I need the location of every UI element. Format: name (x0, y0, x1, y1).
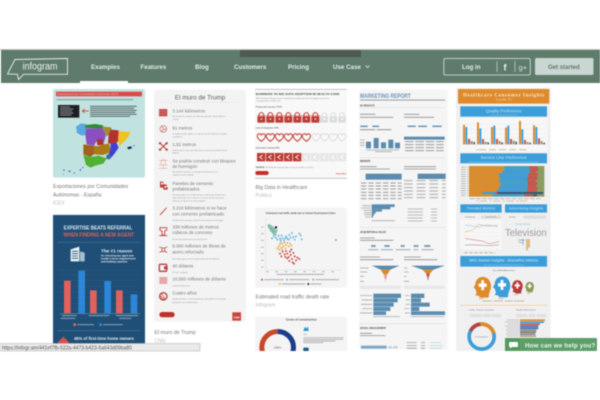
scatter points (269, 225, 336, 264)
#1 reason text: for choosing any agent was (101, 254, 134, 257)
chart title: Estimated road traffic death rate vs Human Development Index (266, 212, 336, 215)
item: length: 3.144 kilómetros (172, 109, 206, 114)
intro text: using big data in health care: (256, 100, 281, 103)
donut: £38bn (274, 345, 282, 349)
loyalty donut (469, 324, 494, 349)
item: 3.218 km: 19 kilómetros más que el hecho con bloques de hormigón (172, 219, 223, 222)
nav links (80, 64, 370, 83)
card: healthcare consumer insights (456, 88, 551, 354)
chart legend (73, 323, 123, 326)
funnel charts (360, 257, 445, 282)
caption: Spain exports: Exportaciones por Comunidades (53, 184, 129, 190)
nav links: Customers (234, 64, 267, 71)
item: 5.000 million pounds: acero reforzado (172, 250, 204, 255)
nav links: Blog (195, 64, 209, 71)
item: 1,52 metres: 1,52 metros (172, 142, 197, 147)
item: four years: Según expertos, el muro podría ser construido en un período (172, 298, 227, 301)
browser status bar (0, 344, 200, 352)
scatter legend (261, 279, 339, 285)
item: 3.218 km: 3.218 kilómetros si se hace (172, 206, 227, 211)
loyalty donut: Full Population (475, 336, 488, 339)
item: length: Recorrería los estados de California, Arizona, Nuevo México (172, 115, 226, 118)
card: Spain exports map (53, 89, 145, 178)
item: 339 million: Serían necesarios para su construcción (172, 238, 207, 241)
item: length (159, 109, 226, 121)
title: Costs of construction (286, 317, 317, 321)
card: marketing report (359, 90, 448, 350)
item: 40 dollars: 40 dólares (172, 263, 194, 268)
first-time owners stat: 46% of first-time home owners (74, 336, 135, 341)
CNN logo: CNN (234, 315, 240, 319)
item: cement panels: metros) y un grosor de ocho pulgadas (172, 200, 206, 203)
item: 91 metres: 91 metros (172, 125, 193, 130)
social engagement heading: SOCIAL ENGAGEMENT (360, 327, 387, 330)
orange header: Healthcare Consumer Insights (463, 93, 544, 98)
CNN logo (232, 312, 241, 321)
item: 5.000 million pounds: Necesarios para unir las separaciones de los bloques (172, 258, 219, 261)
headline: WHEN FINDING A NEW AGENT (63, 232, 134, 238)
differentiators heading: Hospital Differentiators (516, 308, 536, 311)
card: scatter plot (255, 208, 347, 288)
item: concrete blocks (159, 158, 236, 177)
item: 10.560 million (159, 277, 227, 287)
card: costs of construction (255, 317, 347, 363)
item: 3.218 km (160, 206, 227, 222)
login group: f (504, 62, 508, 72)
white area below viewport (0, 351, 600, 400)
grouped bar chart (460, 118, 547, 152)
#1 reason text (101, 248, 136, 263)
website tables (360, 167, 446, 199)
item: 10.560 million: 10.560 millones de dólares (172, 277, 227, 282)
nav links: Examples (91, 64, 120, 71)
item: 40 dollars: Por pie cuadrado (172, 271, 188, 274)
headline (63, 225, 134, 238)
logo: infogram (22, 62, 58, 72)
service line preference bar: Service Line Preference (481, 155, 527, 160)
item: 339 million: cúbicos de concreto (172, 230, 213, 235)
social stats: 94.4% (388, 345, 398, 349)
nav links: Use Case (333, 64, 361, 71)
item: 10.560 million: Coste total del muro (172, 284, 191, 287)
kpi table (404, 137, 445, 151)
nav links: Features (140, 64, 167, 71)
trended metrics bar (460, 204, 502, 213)
column chart (360, 138, 400, 152)
get started button: Get started (548, 65, 580, 71)
#1 reason text: The #1 reason (101, 248, 132, 253)
red pill (255, 171, 269, 175)
television word cloud (505, 222, 547, 250)
caption: Spain exports (53, 184, 129, 206)
browser status bar: https://infogr.am/441ef7fb-522a-4473-b423-6a643d09ba80 (2, 346, 132, 352)
item: cement panels (160, 181, 226, 203)
acquisition stats (360, 238, 434, 250)
loyalty heading: Loyalty - Selection Sensitivity (468, 308, 494, 311)
login group: Log in (462, 64, 481, 71)
item: 5.000 million pounds: 5.000 millones de libras de (172, 244, 226, 249)
item: concrete blocks: de hormigón (172, 164, 198, 169)
item: four years (160, 290, 227, 304)
#1 reason text: and building expertise (101, 260, 128, 263)
building icon (71, 247, 85, 261)
NRC bar: NRC Market Insights - BrandRec Metrics (469, 259, 538, 263)
KU results heading: KU RESULTS (360, 105, 375, 107)
item: concrete blocks: Son fuertes, seguros, se consiguen fácilmente y no (172, 171, 218, 174)
bar chart (58, 270, 140, 318)
caption: Big Data: Politico (256, 193, 272, 199)
item: 1,52 metres: bloques (172, 153, 179, 155)
television word cloud: Television (505, 228, 547, 239)
red title bar: Exportaciones por Comunidades Autónomas (2017) (57, 92, 118, 96)
caption: road traffic: Infogram (256, 302, 275, 308)
advertising insights bar: Advertising Insights (509, 206, 543, 211)
quality preference bar: Quality Preference (486, 108, 522, 113)
Politico logo: POLITICO (336, 173, 346, 175)
trended metrics bar: Trended Metrics (467, 206, 495, 211)
chat icon (509, 342, 518, 348)
item: 1,52 metres (159, 142, 227, 155)
item: cement panels: prefabricados (172, 187, 200, 192)
headline: EXPERTISE BEATS REFERRAL (64, 225, 133, 231)
item: 5.000 million pounds (159, 244, 226, 261)
item: 91 metres (160, 125, 227, 138)
item: length: y Texas (172, 119, 179, 121)
item: concrete blocks: requieren mucho trabajo (172, 174, 195, 177)
nav links: Pricing (288, 64, 309, 71)
map of Spain (63, 123, 135, 175)
social stats (360, 333, 443, 349)
quality preference bar (460, 106, 547, 117)
logo (8, 58, 68, 80)
item: cement panels: altura de 20 pies (seis metros), un ancho de diez pies (tres (172, 197, 224, 200)
login group (444, 58, 530, 75)
orange header (458, 89, 549, 104)
caption: road traffic (256, 294, 329, 308)
item: concrete blocks: Se podría construir con bloques (172, 159, 236, 164)
caption: Spain exports: ICEX (53, 200, 65, 206)
chat button (505, 338, 597, 351)
caption: Big Data: Big Data in Healthcare (256, 185, 308, 191)
tabs row (470, 314, 546, 317)
lock row: privacy: Privacy and security: 70.3% (256, 106, 282, 109)
bar charts (360, 286, 445, 317)
item: 339 million: 339 millones de metros (172, 225, 219, 230)
nav bar (0, 49, 600, 83)
heading: BARRIERS TO BIG DATA ADOPTION IN HEALTH CARE (256, 92, 340, 96)
caption: road traffic: Estimated road traffic death rate (256, 294, 329, 300)
item: cement panels: Serían posibles con el lado del otro. Cada panel tendría una (172, 194, 226, 197)
caption: El muro de Trump: CNN (154, 338, 166, 344)
advertising insights bar (505, 204, 547, 213)
share row: information sharing: Information sharing: 56% (256, 146, 280, 149)
awareness label: Top of Mind Awareness (493, 269, 515, 272)
trended tabs (465, 215, 546, 219)
item: 3.218 km: con cemento prefabricado (172, 211, 225, 216)
note text (90, 106, 137, 116)
login group: g+ (518, 63, 528, 72)
card: El muro de Trump (154, 90, 246, 322)
television word cloud: Social Media (515, 222, 531, 226)
head icons (474, 276, 534, 301)
axes (261, 218, 342, 274)
card title: El muro de Trump (175, 95, 226, 102)
red arrow (82, 109, 89, 113)
acquisition heading: ACQUISITION & SALES (360, 231, 386, 234)
caption: Big Data (256, 185, 308, 199)
website heading: WEBSITE (360, 161, 371, 163)
item: 1,52 metres: Tamaño de la zanja que tiene que excavar para la base de los (172, 149, 227, 152)
item: 91 metres: con México (172, 136, 183, 138)
red share pill (159, 312, 175, 317)
item: 91 metres: La distancia que separa, a cada una de las fronteras estatales (172, 132, 227, 135)
source: SOURCE: World Health Organization survey of member countries (256, 166, 314, 169)
differentiators chart (505, 319, 545, 337)
#1 reason text: insider's know neighborhood (101, 257, 136, 260)
intro text (256, 97, 330, 103)
orange header: Knoxville, TN (496, 98, 512, 102)
line chart (460, 220, 502, 253)
caption: El muro de Trump (154, 330, 196, 344)
heart row: integration: Lack of integration: 59% (256, 126, 279, 129)
horizontal bar chart (361, 204, 437, 221)
report title: MARKETING REPORT (360, 93, 411, 100)
chat label: How can we help you? (525, 342, 595, 350)
item: 40 dollars (159, 263, 194, 274)
item: four years: productivo sin contratiempos (172, 301, 198, 304)
caption: Spain exports: Autónomas - España (53, 192, 102, 198)
side note (303, 326, 343, 353)
item: four years: Cuatro años (172, 290, 198, 295)
black key box (58, 105, 79, 118)
intro text: WHO European Region states considered the following to be the biggest barriers to (256, 97, 330, 100)
house icon (58, 337, 69, 349)
service line preference bar (460, 153, 547, 163)
card: expertise beats referral (53, 215, 145, 349)
stacked legend (476, 200, 527, 202)
item: cement panels: Paneles de cemento (172, 181, 214, 186)
kpi text (360, 114, 442, 130)
card: Big Data in Healthcare (255, 89, 347, 178)
get started button (535, 58, 594, 75)
caption: El muro de Trump: El muro de Trump (154, 330, 196, 336)
item: 339 million (159, 225, 219, 241)
NRC bar (460, 256, 547, 267)
stacked bar chart (461, 166, 544, 199)
